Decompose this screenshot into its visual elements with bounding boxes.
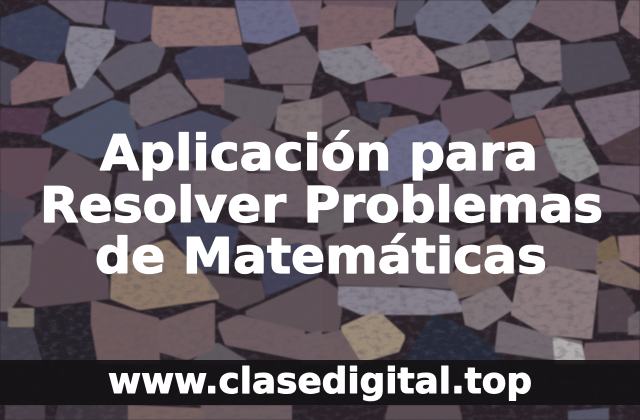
title line 2: Resolver Problemas (40, 177, 603, 234)
website url: www.clasedigital.top (108, 361, 532, 402)
footer band (0, 360, 640, 405)
title line 3: de Matemáticas (95, 228, 547, 285)
title line 1: Aplicación para (100, 125, 538, 182)
